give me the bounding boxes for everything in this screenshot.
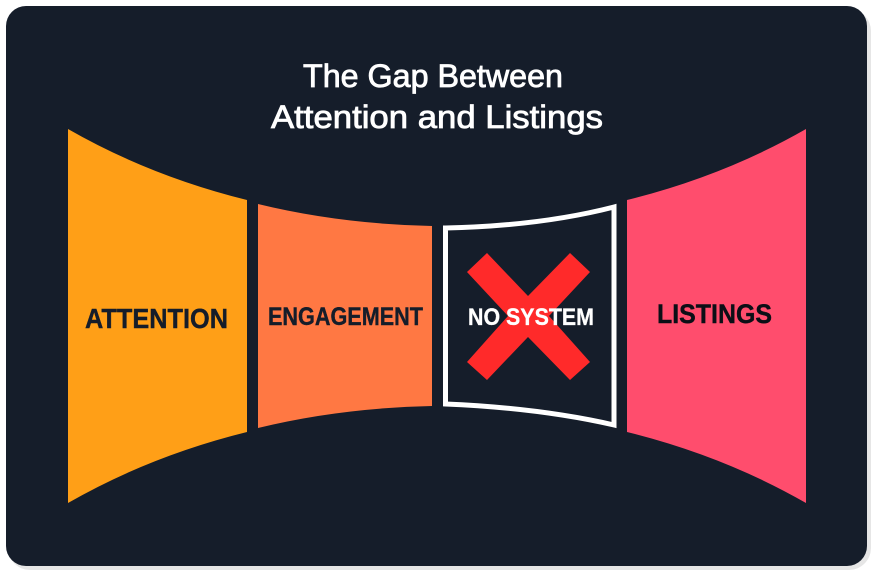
title bbox=[271, 58, 603, 135]
panel: attention bbox=[68, 129, 247, 503]
panel: attention: ATTENTION bbox=[85, 303, 228, 334]
panel: listings bbox=[627, 129, 806, 503]
title: Attention and Listings bbox=[271, 99, 603, 135]
panel: engagement: ENGAGEMENT bbox=[268, 303, 423, 331]
label: no system: NO SYSTEM bbox=[468, 304, 594, 331]
title: The Gap Between bbox=[303, 58, 563, 94]
panel: engagement bbox=[258, 204, 432, 428]
icon: red cross bbox=[467, 253, 590, 380]
panel: no system bbox=[446, 207, 614, 425]
frame bbox=[446, 207, 614, 425]
panel: listings: LISTINGS bbox=[657, 299, 772, 329]
